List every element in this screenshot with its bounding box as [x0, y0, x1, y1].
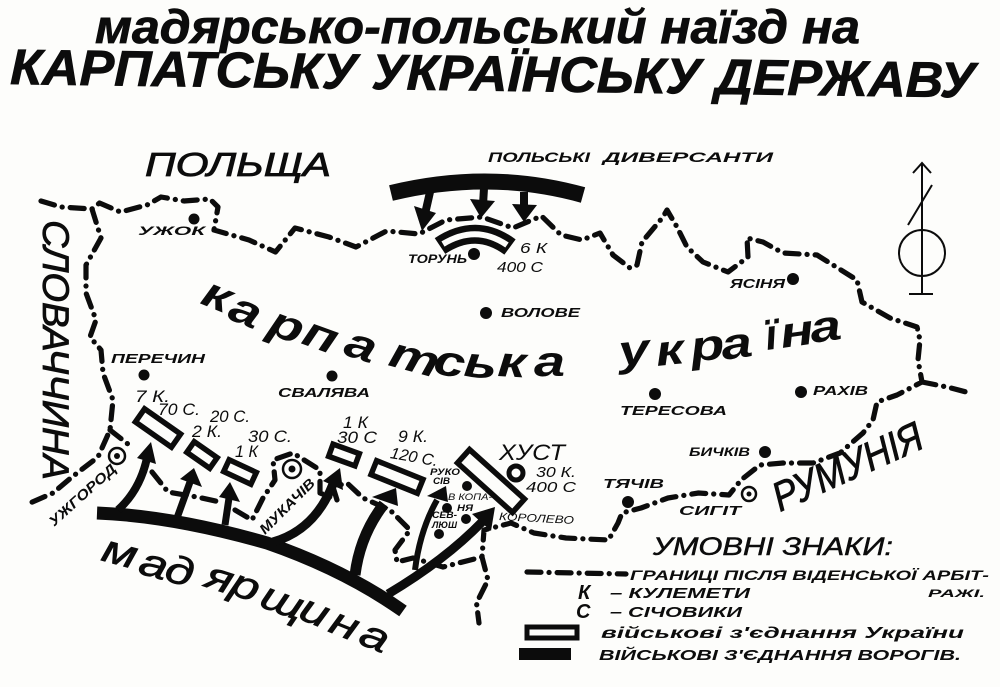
place and strength labels: РАХІВ [813, 383, 868, 398]
place and strength labels: ДИВЕРСАНТИ [601, 149, 775, 165]
place and strength labels: 7 К. [135, 387, 170, 406]
arrow 1 [118, 442, 156, 510]
region label: Carpatho-Ukraine: а [222, 282, 269, 338]
country label: Hungary: а [135, 539, 173, 589]
legend: enemy forces [519, 646, 961, 664]
country label: Hungary: щ [255, 573, 311, 629]
country label: Romania: РУМУНІЯ [765, 413, 930, 520]
place and strength labels: ЛЮШ [431, 520, 457, 530]
country label: Hungary [98, 526, 396, 662]
region label: Carpatho-Ukraine: к [653, 324, 689, 375]
country label: Hungary: м [98, 526, 143, 577]
country label: Poland: ПОЛЬЩА [145, 146, 331, 183]
region label: Carpatho-Ukraine: у [613, 324, 654, 376]
place and strength labels: УЖГОРОД [45, 460, 119, 529]
region label: Carpatho-Ukraine: ь [462, 337, 499, 388]
Ukrainian force: Torun [440, 234, 510, 247]
region label: Carpatho-Ukraine: р [261, 296, 311, 354]
legend: border line: РАЖІ. [928, 588, 985, 600]
place and strength labels: ХУСТ [498, 440, 567, 465]
title line 1: мадярсько-польський наїзд на [95, 0, 860, 53]
legend: enemy forces: ВІЙСЬКОВІ З'ЄДНАННЯ ВОРОГІВ. [599, 646, 961, 664]
region label: Carpatho-Ukraine: с [430, 335, 469, 388]
arrow 6 [415, 486, 448, 570]
arrow 4 [273, 468, 343, 542]
place and strength labels: 30 С. [248, 427, 292, 446]
region label: Carpatho-Ukraine: а [718, 317, 755, 369]
region label: Carpatho-Ukraine [195, 267, 844, 388]
place and strength labels: 400 С [526, 479, 576, 496]
place and strength labels: ЯСІНЯ [729, 276, 786, 291]
region label: Carpatho-Ukraine: п [297, 307, 345, 364]
place and strength labels: 1 К [343, 413, 369, 432]
place and strength labels: МУКАЧІВ [256, 475, 318, 537]
country label: Hungary: а [354, 610, 396, 662]
place and strength labels: УЖОК [138, 224, 208, 238]
place and strength labels: ПОЛЬСЬКІ [488, 149, 592, 165]
place and strength labels: 2 К. [191, 422, 222, 441]
legend [519, 533, 989, 664]
place and strength labels: СЕВ- [432, 510, 457, 520]
place and strength labels: КОРОЛЕВО [499, 511, 575, 527]
place and strength labels: ТЕРЕСОВА [620, 403, 727, 418]
place and strength labels: ТОРУНЬ [408, 252, 468, 266]
Ukrainian force boxes [135, 409, 525, 512]
place and strength labels: ВОЛОВЕ [501, 305, 580, 320]
region label: Carpatho-Ukraine: н [777, 305, 817, 357]
country label: Hungary: и [294, 585, 336, 637]
place and strength labels: БИЧКІВ [689, 445, 750, 459]
country label: Hungary: н [324, 598, 366, 649]
country label: Hungary: д [161, 546, 199, 596]
legend: machine guns [578, 582, 752, 604]
place and strength labels [45, 149, 868, 537]
arrow 3 [219, 482, 240, 525]
place and strength labels: 20 С. [209, 407, 250, 426]
region label: Carpatho-Ukraine: а [534, 337, 565, 385]
legend: machine guns: – КУЛЕМЕТИ [610, 585, 752, 602]
place and strength labels: СВАЛЯВА [278, 385, 370, 400]
region label: Carpatho-Ukraine: т [385, 328, 445, 387]
place and strength labels: 1 К [235, 442, 259, 461]
place and strength labels: РУКО [430, 467, 460, 477]
legend: Sich riflemen [576, 601, 744, 623]
arrow 7 [388, 507, 495, 594]
place and strength labels: 120 С. [389, 445, 439, 470]
legend: machine guns: К [578, 582, 592, 604]
legend: Ukrainian forces [527, 625, 964, 642]
legend: border line [527, 567, 989, 600]
region label: Carpatho-Ukraine: а [339, 317, 384, 373]
region label: Carpatho-Ukraine: р [685, 319, 727, 372]
town markers [138, 214, 807, 539]
place and strength labels: СИГІТ [679, 503, 743, 518]
ringed city symbols [109, 448, 756, 501]
place and strength labels: НЯ [457, 503, 474, 513]
place and strength labels: 30 С [337, 428, 378, 447]
country label: Hungary: я [198, 552, 240, 603]
legend: Sich riflemen: С [576, 601, 591, 623]
region label: Carpatho-Ukraine: а [807, 300, 844, 352]
place and strength labels: 70 С. [158, 400, 200, 419]
place and strength labels: ПЕРЕЧИН [111, 351, 206, 366]
enemy forces: Polish saboteurs [391, 181, 583, 231]
region label: Carpatho-Ukraine: к [195, 267, 243, 324]
country label: Hungary: р [223, 559, 267, 611]
borders after the Vienna Arbitration [30, 197, 970, 623]
arrow 5 [355, 488, 398, 575]
legend: Sich riflemen: – СІЧОВИКИ [610, 604, 744, 621]
place and strength labels: 6 К [520, 240, 548, 257]
place and strength labels: ТЯЧІВ [603, 476, 664, 491]
region label: Carpatho-Ukraine: к [497, 337, 530, 387]
north arrow symbol [899, 163, 945, 294]
place and strength labels: 9 К. [398, 427, 428, 446]
enemy forces: Hungarian front [97, 442, 495, 611]
title line 2: КАРПАТСЬКУ УКРАЇНСЬКУ ДЕРЖАВУ [10, 39, 980, 109]
place and strength labels: В КОПА- [448, 492, 492, 502]
region label: Carpatho-Ukraine: ї [762, 310, 785, 360]
place and strength labels: 400 С [497, 259, 543, 276]
place and strength labels: 30 К. [536, 464, 576, 481]
legend: border line: ГРАНИЦІ ПІСЛЯ ВІДЕНСЬКОЇ АРБІТ- [630, 567, 989, 583]
place and strength labels: СІВ [433, 476, 451, 486]
legend: Ukrainian forces: військові з'єднання України [601, 625, 964, 642]
arrow 2 [177, 468, 202, 518]
legend heading: УМОВНІ ЗНАКИ: [652, 533, 893, 561]
country label: Slovakia: СЛОВАЧЧИНА [35, 220, 76, 480]
